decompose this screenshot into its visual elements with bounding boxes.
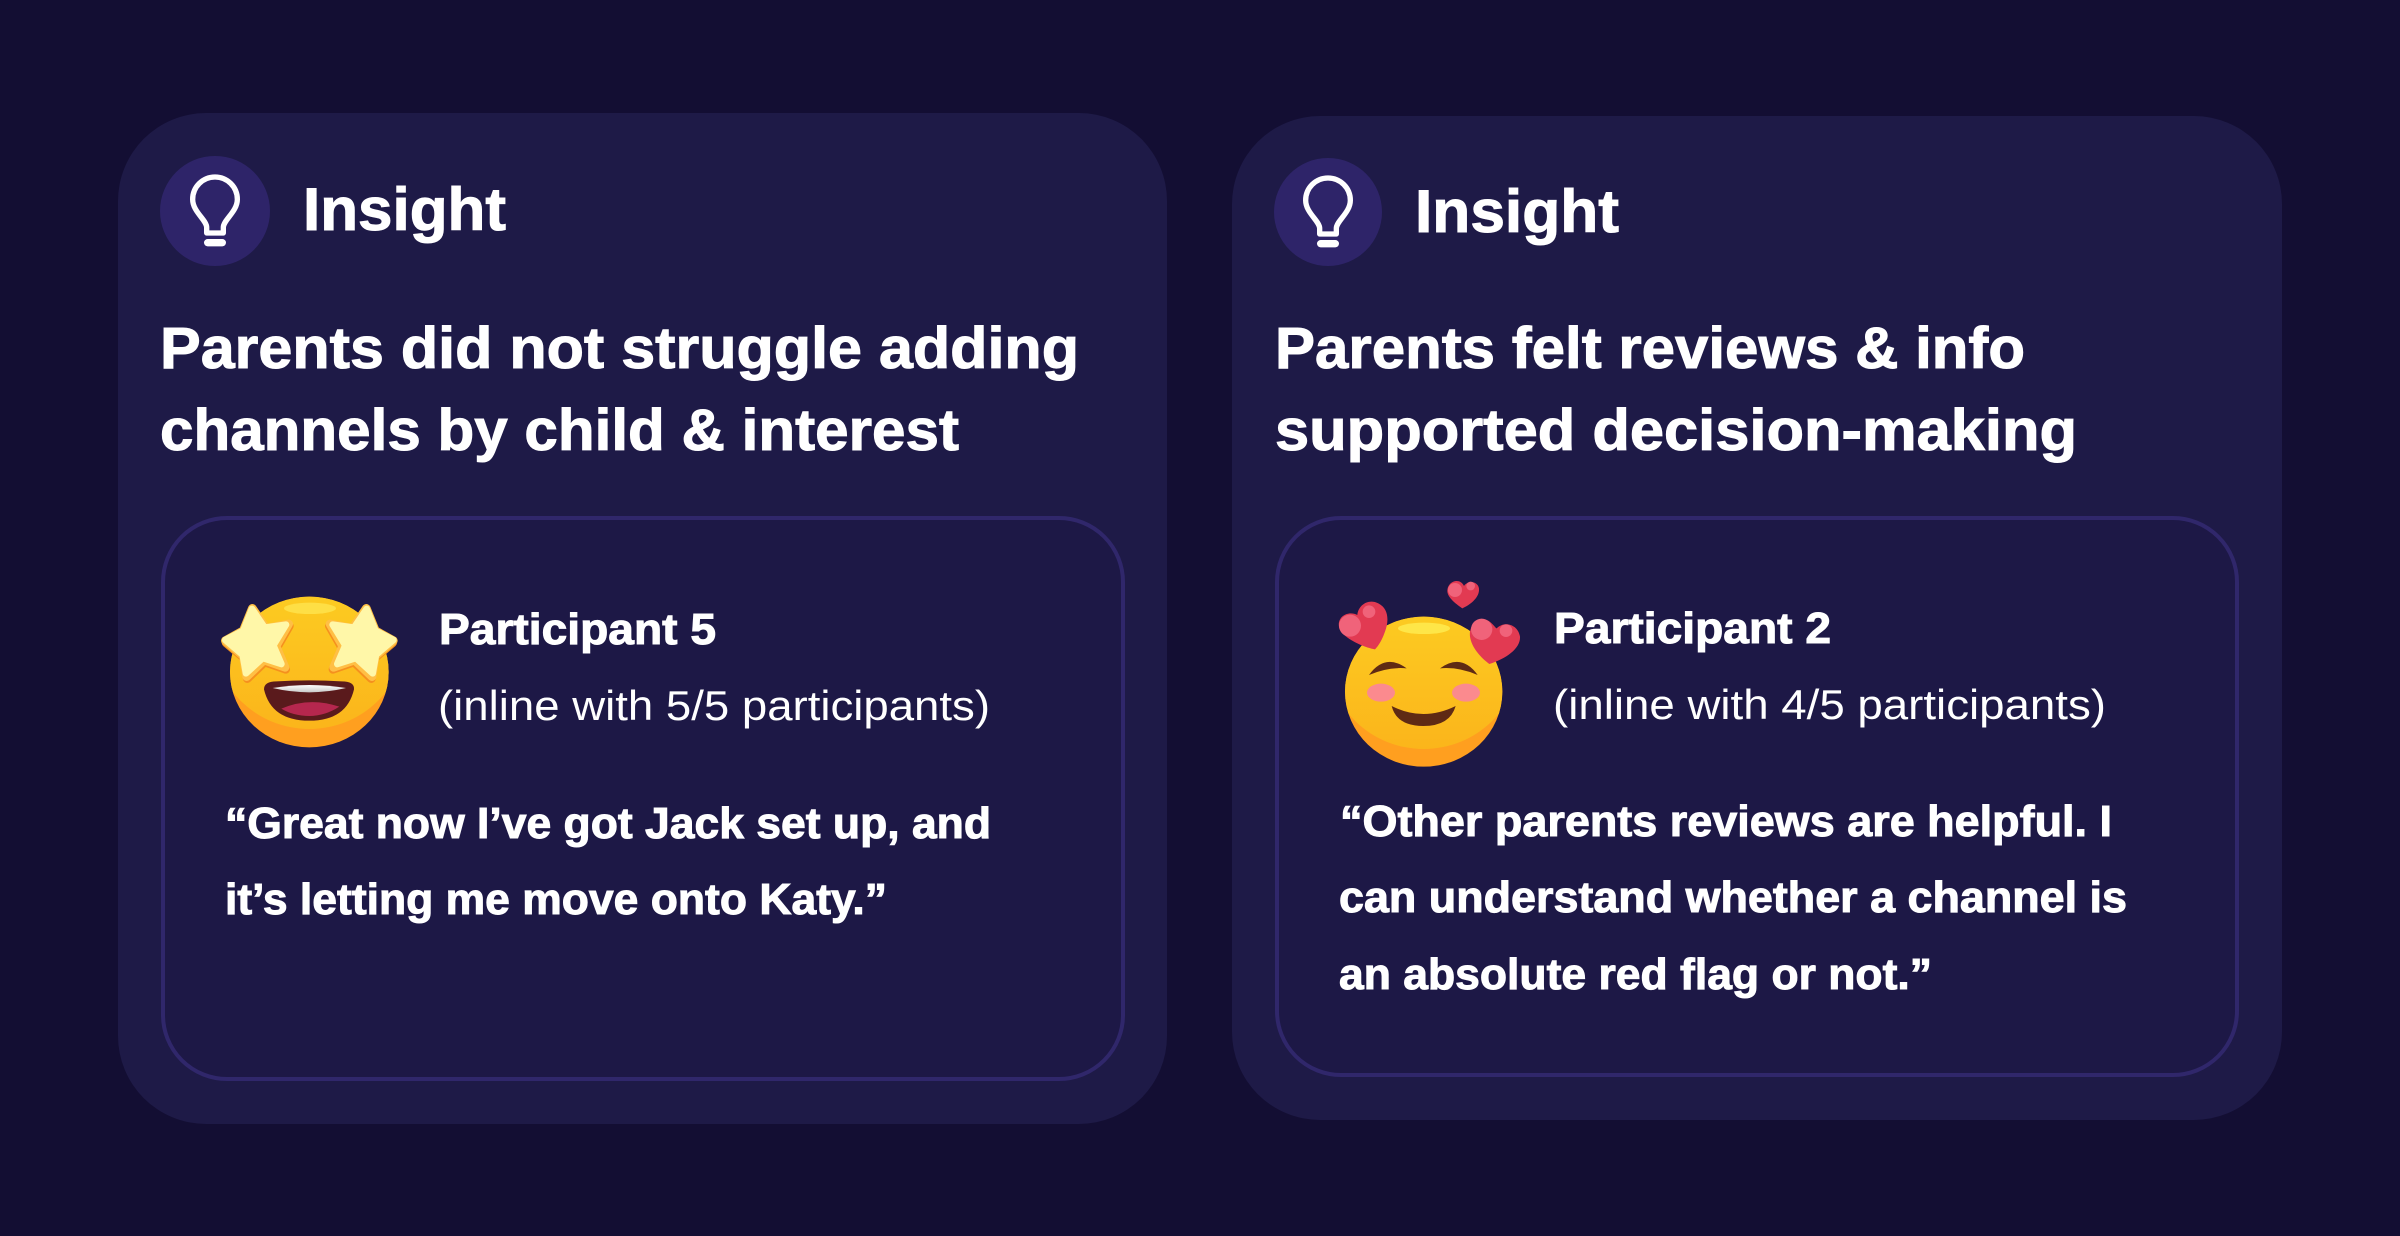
left star: [225, 608, 289, 679]
heading: left insight: channels by child & interest: [160, 398, 959, 463]
right heart: [1470, 619, 1520, 664]
icon: lightbulb badge: [1274, 158, 1382, 266]
text: participant name: Participant 2: [1554, 604, 1831, 653]
text: quote: an absolute red flag or not.”: [1339, 950, 1932, 999]
text: participant note: (inline with 5/5 participants): [438, 682, 990, 729]
icon: lightbulb badge: [160, 156, 270, 266]
panel: right insight card: [1232, 116, 2282, 1120]
text: quote: can understand whether a channel is: [1339, 873, 2127, 922]
heading: right insight: supported decision-making: [1275, 398, 2077, 463]
mouth: [264, 680, 354, 721]
text: quote: “Other parents reviews are helpful. I: [1340, 797, 2112, 846]
heading: right insight: [1275, 316, 2077, 463]
label: Insight: Insight: [1415, 178, 1619, 245]
label: Insight: Insight: [303, 176, 506, 243]
panel: participant 2 quote box: [1277, 518, 2237, 1075]
text: quote: [1339, 797, 2127, 999]
panel: participant 5 quote box: [163, 518, 1123, 1079]
heading: left insight: Parents did not struggle adding: [160, 316, 1079, 381]
text: quote: it’s letting me move onto Katy.”: [225, 875, 887, 924]
text: quote: [225, 799, 991, 924]
panel: left insight card: [118, 113, 1167, 1124]
text: participant name: Participant 5: [439, 605, 716, 654]
icon: star-struck emoji: [221, 596, 398, 748]
heading: right insight: Parents felt reviews & info: [1275, 316, 2025, 381]
heading: left insight: [160, 316, 1079, 463]
text: participant note: (inline with 4/5 participants): [1553, 681, 2106, 728]
icon: smiling face with hearts emoji: [1338, 581, 1520, 767]
left heart: [1339, 602, 1387, 649]
right star: [329, 608, 393, 679]
small top heart: [1447, 581, 1479, 608]
text: quote: “Great now I’ve got Jack set up, and: [225, 799, 991, 848]
